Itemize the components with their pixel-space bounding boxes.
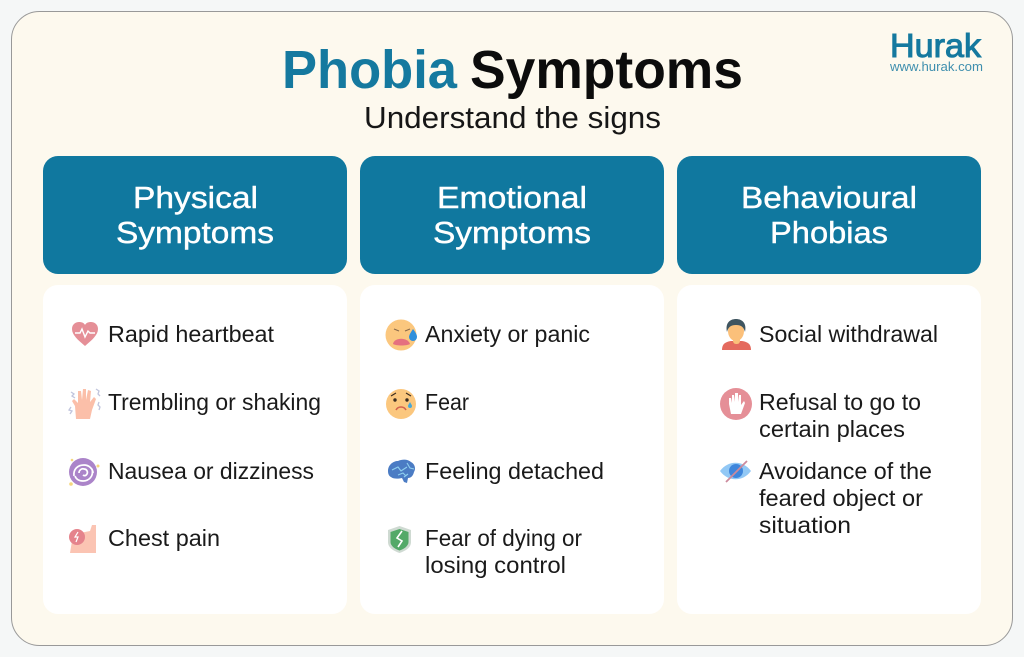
icon: heart with pulse — [72, 322, 98, 346]
text: nausea or dizziness: Nausea or dizziness — [108, 458, 314, 484]
title: Symptoms — [470, 40, 743, 100]
icon: chest pain — [69, 525, 96, 553]
text: social withdrawal: Social withdrawal — [759, 321, 938, 347]
text: rapid heartbeat: Rapid heartbeat — [108, 321, 274, 347]
panel: emotional symptoms list — [360, 285, 664, 614]
panel header: Physical Symptoms: Symptoms — [116, 215, 274, 250]
text: avoidance of the feared object or situation — [759, 458, 932, 538]
text: trembling or shaking: Trembling or shaking — [108, 389, 321, 415]
text: fear of dying or losing control — [425, 525, 582, 578]
panel header: Physical Symptoms — [43, 156, 347, 274]
text: avoidance of the feared object or situation: situation — [759, 512, 851, 538]
text: fear of dying or losing control: losing control — [425, 552, 566, 578]
text: fear: Fear — [425, 389, 469, 415]
text: avoidance of the feared object or situation: feared object or — [759, 485, 923, 511]
title — [282, 40, 743, 100]
subtitle: Understand the signs — [364, 100, 661, 135]
icon: stop hand — [720, 388, 752, 420]
panel: physical symptoms list — [43, 285, 347, 614]
text: refusal to go to certain places — [759, 389, 921, 442]
icon: fearful face — [386, 389, 416, 419]
panel header: Emotional Symptoms: Emotional — [437, 180, 587, 215]
icon: person — [722, 319, 751, 350]
panel: behavioural phobias list — [677, 285, 981, 614]
logo: Hurak: www.hurak.com — [889, 60, 983, 74]
text: anxiety or panic: Anxiety or panic — [425, 321, 590, 347]
icon: brain — [388, 460, 415, 483]
panel header: Emotional Symptoms: Symptoms — [433, 215, 591, 250]
panel header: Physical Symptoms: Physical — [133, 180, 258, 215]
icon: dizziness spiral — [69, 458, 100, 486]
panel header: Emotional Symptoms — [360, 156, 664, 274]
text: avoidance of the feared object or situation: Avoidance of the — [759, 458, 932, 484]
text: chest pain: Chest pain — [108, 525, 220, 551]
icon: trembling hand — [69, 389, 100, 419]
title: Phobia — [282, 40, 458, 100]
icon: crossed-out eye — [720, 461, 751, 482]
text: feeling detached: Feeling detached — [425, 458, 604, 484]
panel header: Behavioural Phobias: Phobias — [770, 215, 888, 250]
panel header: Behavioural Phobias — [677, 156, 981, 274]
text: refusal to go to certain places: certain places — [759, 416, 905, 442]
text: refusal to go to certain places: Refusal to go to — [759, 389, 921, 415]
text: fear of dying or losing control: Fear of dying or — [425, 525, 582, 551]
icon: cracked shield — [388, 526, 411, 553]
logo: Hurak: Hurak — [890, 27, 982, 64]
panel header: Behavioural Phobias: Behavioural — [741, 180, 917, 215]
icon: anxious face — [386, 320, 417, 350]
